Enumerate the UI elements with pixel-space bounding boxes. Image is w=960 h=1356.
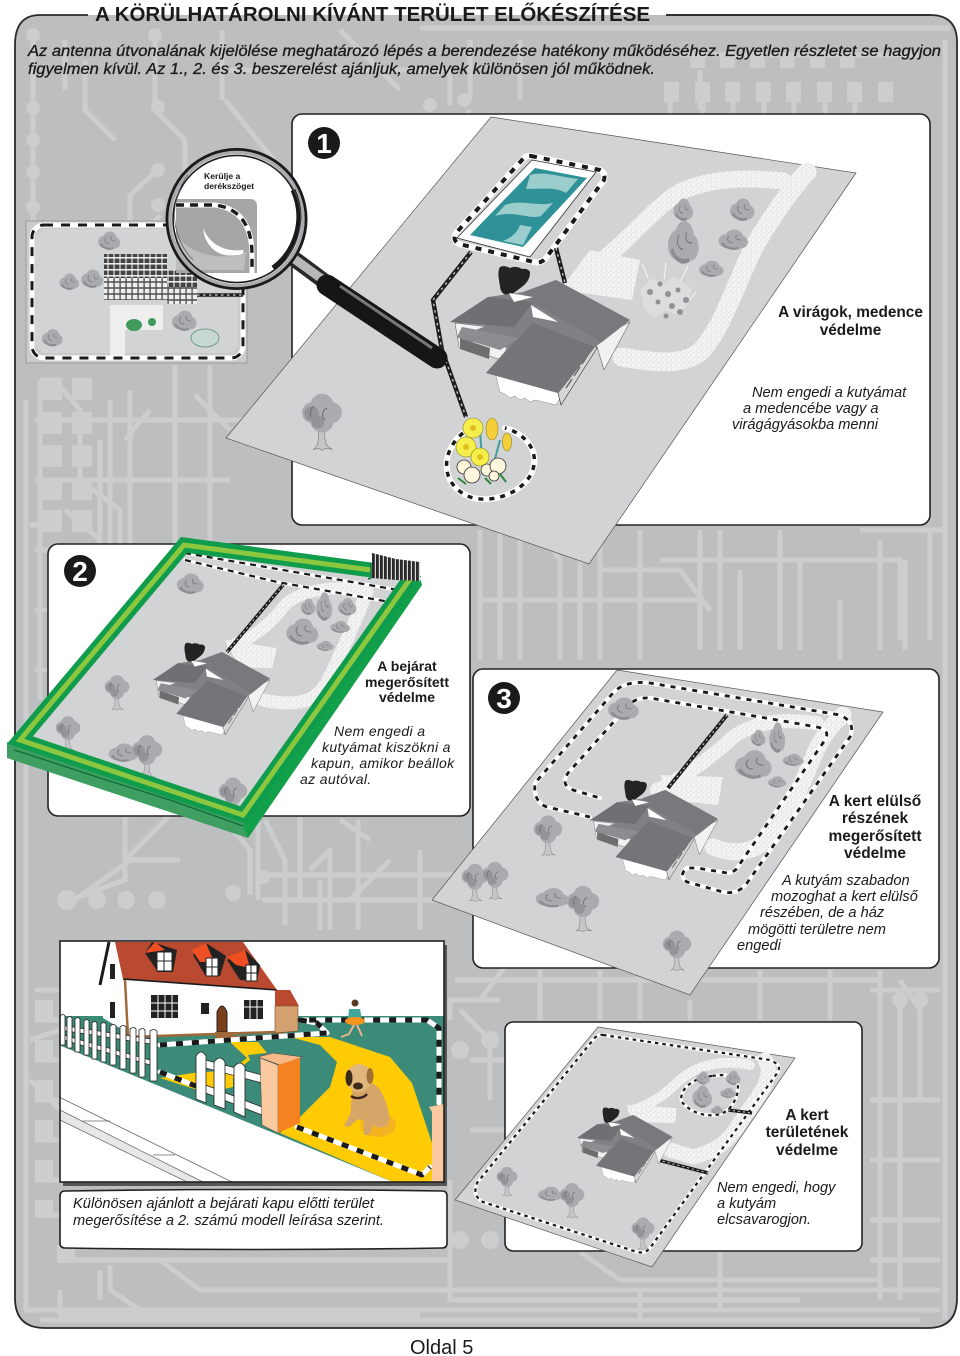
panel 3 description: A kutyám szabadon <box>781 873 910 889</box>
lot plan 1 <box>226 117 856 564</box>
panel 3 description: részében, de a ház <box>760 905 885 921</box>
caption text: megerősítése a 2. számú modell leírása szerint. <box>73 1213 384 1229</box>
panel 3 heading: A kert elülső <box>829 793 921 810</box>
tree 1 <box>302 394 342 450</box>
photo panel: recommended gate area <box>59 941 447 1186</box>
shrubs 1 <box>668 198 754 277</box>
panel 4 description <box>717 1180 837 1228</box>
panel 4 heading <box>766 1107 849 1159</box>
flower circle <box>447 428 534 499</box>
gravel driveway 1 <box>560 172 807 362</box>
panel 2 heading: megerősített <box>365 674 449 690</box>
zoomed corner <box>176 199 257 273</box>
windows and door <box>151 995 263 1036</box>
dog <box>344 1064 396 1137</box>
panel 2 heading: A bejárat <box>377 658 437 674</box>
lens rim <box>167 150 306 288</box>
woman walking <box>341 1000 365 1037</box>
panel 2 description <box>300 723 455 787</box>
chain 3 <box>668 715 727 788</box>
house 4 <box>577 1107 672 1183</box>
panel 3 heading <box>828 793 922 862</box>
panel 2 description: kapun, amikor beállok <box>311 755 455 771</box>
title rule right <box>666 14 930 16</box>
intro text: Az antenna útvonalának kijelölése meghatározó lépés a berendezése hatékony működéséhez. Egyetlen részletet se hagyjon <box>27 43 941 60</box>
flowers <box>456 418 512 484</box>
garage <box>275 990 299 1006</box>
dashed route 3 <box>535 682 852 893</box>
lot plan 3 <box>432 670 883 995</box>
pool with dashed loop <box>455 156 604 262</box>
trees 4 <box>497 1167 654 1250</box>
panel 3 description: engedi <box>737 938 782 954</box>
dashed entrance lines <box>185 553 398 602</box>
house 1 <box>450 266 630 405</box>
loupe label <box>204 171 254 191</box>
panel 1 heading: A virágok, medence <box>778 304 923 321</box>
panel 2 number <box>64 555 96 587</box>
panel 2 heading: védelme <box>379 689 435 705</box>
panel 3 description <box>737 873 919 954</box>
panel 1 heading: védelme <box>820 322 882 339</box>
panel 1 number: 1 <box>316 128 332 159</box>
panel 1 description: virágágyásokba menni <box>732 417 879 433</box>
house 3 <box>590 780 718 880</box>
caption text: Különösen ajánlott a bejárati kapu előtti terület <box>73 1196 375 1212</box>
panel 1: flowers and pool protection <box>226 114 930 564</box>
handle <box>327 285 437 358</box>
dashed route 4 <box>475 1035 779 1252</box>
loupe label: Kerülje a <box>204 171 241 181</box>
left picket fence <box>60 1014 157 1081</box>
panel 2 description: Nem engedi a <box>334 723 425 739</box>
panel 1 description <box>732 385 907 433</box>
panel 3 number <box>488 682 520 714</box>
loupe label: derékszöget <box>204 181 254 191</box>
gravel driveway 4 <box>627 1060 768 1157</box>
magnifying glass <box>167 150 437 358</box>
chains 4 <box>658 1110 752 1173</box>
panel 4 description: Nem engedi, hogy <box>717 1180 837 1196</box>
gate pillar <box>258 1053 303 1133</box>
gate <box>372 553 420 581</box>
shrubs 4 <box>538 1071 740 1201</box>
lens <box>172 154 302 284</box>
title: A KÖRÜLHATÁROLNI KÍVÁNT TERÜLET ELŐKÉSZÍTÉSE <box>95 3 650 26</box>
panel 1 heading <box>778 304 923 339</box>
caption box <box>60 1190 447 1250</box>
panel 2 description: az autóval. <box>300 771 372 787</box>
shrubs 2 <box>109 574 356 762</box>
panel 3 description: mögötti területre nem <box>748 922 886 938</box>
trees 3 <box>462 816 691 971</box>
gravel driveway 3 <box>657 715 843 852</box>
panel 3 heading: védelme <box>844 845 906 862</box>
chains to pool <box>433 248 565 417</box>
panel 3 heading: részének <box>842 810 909 827</box>
panel 3 description: mozoghat a kert elülső <box>771 889 919 905</box>
panel 3: front garden protection <box>432 669 939 995</box>
lot plan 2 <box>25 540 418 815</box>
handle shine <box>340 286 432 348</box>
site plan inset <box>26 221 247 363</box>
gravel driveway 2 <box>225 588 367 703</box>
dashed boundary in photo <box>160 1020 439 1175</box>
panel 4 heading: területének <box>766 1124 849 1141</box>
panel 4: whole garden protection <box>455 1022 862 1267</box>
lawn <box>59 1016 444 1182</box>
yellow footpath <box>160 1042 267 1093</box>
panel 1 description: a medencébe vagy a <box>743 401 878 417</box>
panel 3 heading: megerősített <box>828 828 922 845</box>
dormers <box>145 942 260 981</box>
panel 3 number: 3 <box>496 683 512 714</box>
panel 2 description: kutyámat kiszökni a <box>322 739 451 755</box>
house illustration <box>100 942 299 1037</box>
lot plan 4 <box>455 1027 795 1267</box>
panel 2 number: 2 <box>72 556 88 587</box>
right pillar <box>429 1104 444 1182</box>
chain 2 <box>227 585 283 652</box>
panel 4 description: a kutyám <box>717 1196 776 1212</box>
panel 2: entrance protection <box>7 540 470 838</box>
shrubs 3 <box>536 697 804 908</box>
panel 1 number <box>308 127 340 159</box>
yellow driveway <box>280 1037 432 1182</box>
caption text <box>73 1196 384 1229</box>
flower bed gray <box>640 262 696 318</box>
right picket fence <box>196 1052 262 1117</box>
intro text: figyelmen kívül. Az 1., 2. és 3. beszerelést ajánljuk, amelyek különösen jól működnek. <box>28 61 655 78</box>
handle connector <box>293 258 324 281</box>
connector highlight <box>293 258 322 279</box>
photo border <box>60 941 444 1182</box>
panel 2 heading <box>365 658 449 705</box>
trees 2 <box>56 675 247 818</box>
intro text <box>27 43 941 78</box>
street <box>59 1097 232 1182</box>
panel 4 heading: védelme <box>776 1142 838 1159</box>
hedge <box>7 545 422 838</box>
panel 4 heading: A kert <box>785 1107 829 1124</box>
panel 4 description: elcsavarogjon. <box>717 1212 811 1228</box>
house 2 <box>153 643 270 735</box>
panel 1 description: Nem engedi a kutyámat <box>752 385 907 401</box>
